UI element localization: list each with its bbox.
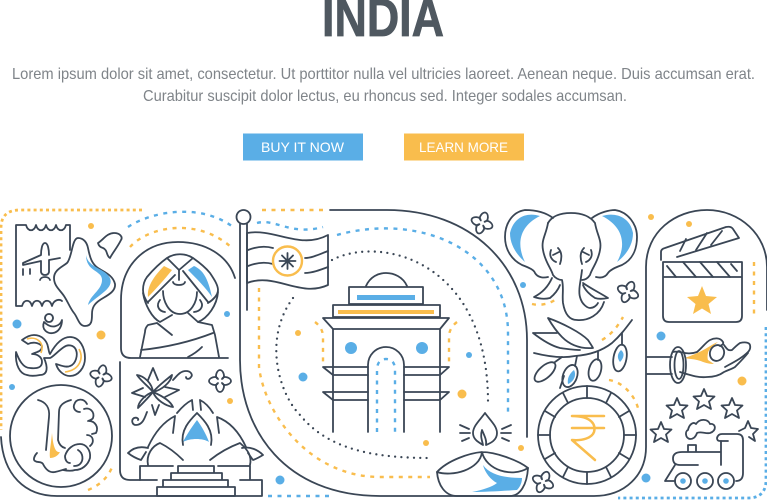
icon: hand mudra [647, 338, 750, 383]
icon: diya lamp [437, 413, 528, 496]
icon: nose ring circle [10, 385, 112, 487]
icon: star flower [132, 368, 192, 425]
icon: flower [88, 363, 114, 389]
icon: steam train [665, 420, 743, 489]
icon: clapperboard [661, 227, 742, 322]
icon: woman in sari [140, 254, 219, 357]
icon: rupee coin [538, 386, 636, 484]
decorative dots [9, 214, 746, 484]
icon: om symbol [16, 314, 85, 376]
frame lines and dashed paths [1, 210, 767, 498]
icon: elephant [505, 210, 637, 320]
icon: flower [613, 277, 643, 307]
icon: flag of India [236, 210, 328, 310]
icon: map of India [54, 233, 122, 326]
icon: plane ticket [16, 225, 70, 306]
icon: date palm branch [531, 318, 632, 389]
button: learn more: LEARN MORE [419, 139, 508, 155]
description text: Curabitur suscipit dolor lectus, eu rhoncus sed. Integer sodales accumsan. [143, 88, 627, 105]
icon: flower [468, 209, 496, 237]
icon: lotus temple [128, 400, 263, 496]
description text [12, 66, 755, 105]
button: buy it now: BUY IT NOW [261, 139, 345, 155]
button: learn more [404, 134, 524, 160]
button: buy it now [243, 134, 363, 160]
icon: flower [209, 370, 231, 392]
icon: india gate [323, 273, 449, 432]
icon: flower [528, 467, 558, 497]
icon: stars [650, 389, 758, 442]
